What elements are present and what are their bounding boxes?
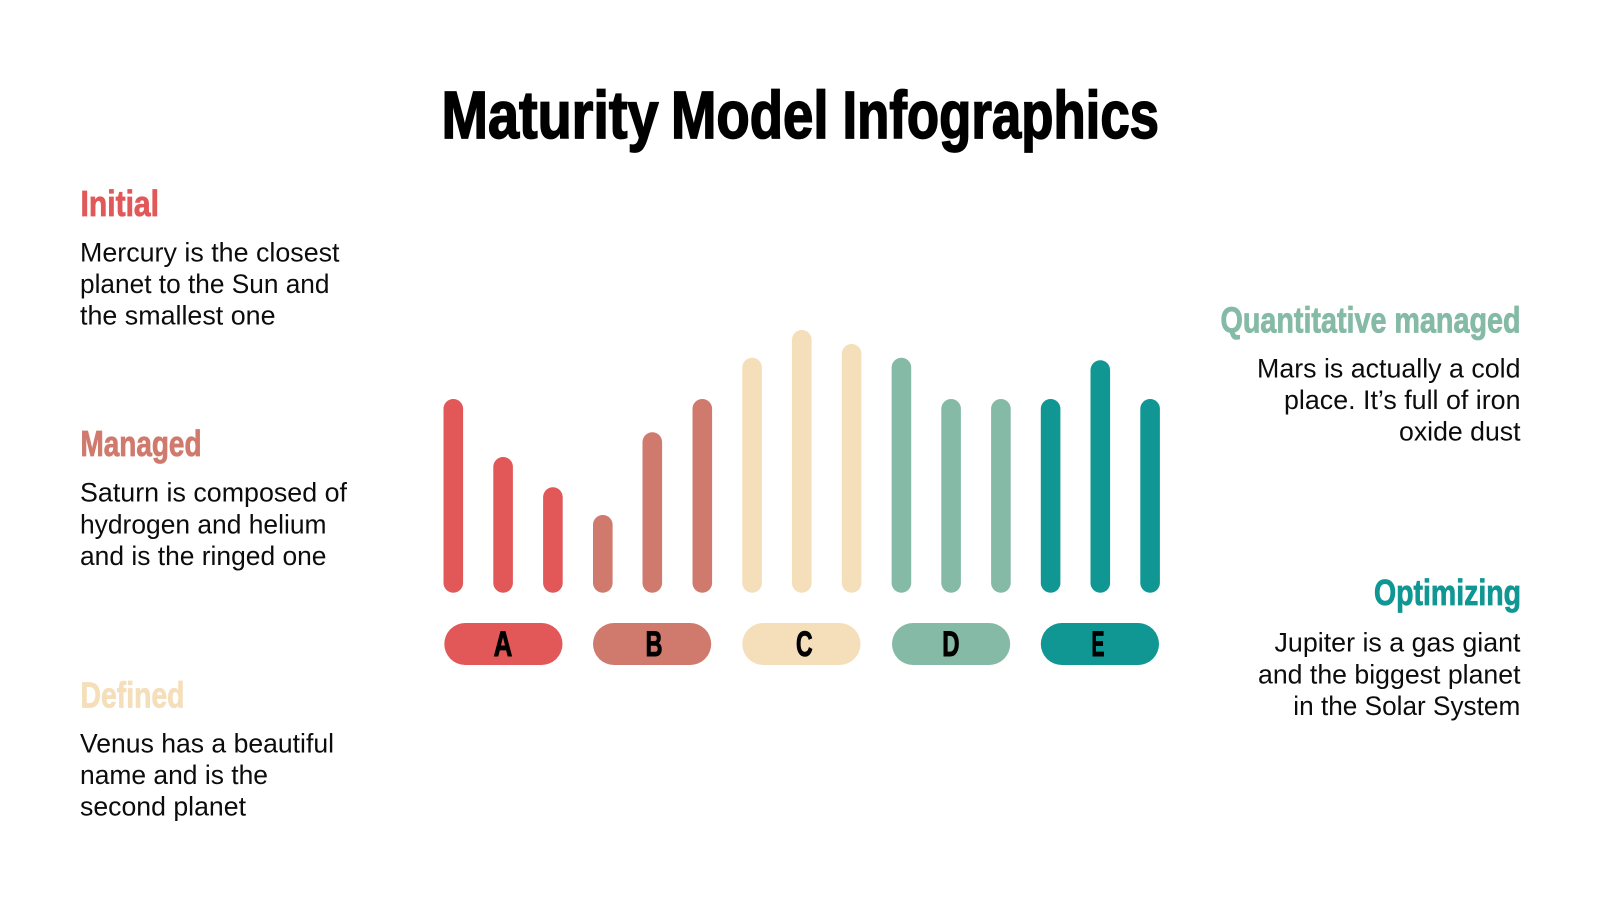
panel: Defined — [80, 674, 334, 821]
pill A: A — [494, 625, 512, 664]
title: Model — [671, 78, 828, 153]
pill C: C — [796, 625, 813, 664]
text: Defined description: Venus has a beautiful — [80, 729, 334, 759]
bar group D — [892, 358, 1011, 593]
bar group E — [1041, 360, 1160, 593]
panel: Quantitative managed — [1220, 300, 1521, 446]
text: Managed description: hydrogen and helium — [80, 510, 326, 540]
title — [442, 78, 1159, 153]
panel: Optimizing — [1258, 572, 1521, 721]
text: Defined description — [80, 729, 334, 821]
text: Defined description: name and is the — [80, 760, 268, 790]
text: Initial description: planet to the Sun and — [80, 269, 330, 299]
panel: Initial — [80, 183, 340, 330]
category pills — [444, 623, 1159, 665]
text: Managed description: and is the ringed one — [80, 541, 326, 571]
text: Optimizing description — [1258, 628, 1521, 721]
pill B: B — [646, 625, 662, 664]
text: Optimizing description: and the biggest planet — [1258, 659, 1521, 689]
text: Quantitative managed description: oxide dust — [1399, 416, 1521, 446]
pill D — [892, 623, 1010, 665]
text: Managed description — [80, 478, 348, 571]
heading: Managed: Managed — [80, 423, 202, 464]
text: Initial description: the smallest one — [80, 300, 276, 330]
heading: Quantitative managed: Quantitative managed — [1220, 300, 1520, 340]
bar group A — [444, 399, 563, 593]
text: Initial description: Mercury is the closest — [80, 238, 340, 268]
bar group B — [593, 399, 712, 593]
title: Maturity — [442, 78, 658, 153]
text: Quantitative managed description: place. It’s full of iron — [1284, 385, 1520, 415]
pill D: D — [942, 625, 960, 664]
text: Managed description: Saturn is composed of — [80, 478, 348, 508]
pill B — [593, 623, 711, 665]
title: Infographics — [842, 78, 1159, 153]
pill E: E — [1092, 625, 1104, 664]
panel: Managed — [80, 423, 348, 571]
heading: Initial: Initial — [80, 183, 159, 224]
heading: Optimizing: Optimizing — [1374, 572, 1521, 613]
pill E — [1041, 623, 1159, 665]
text: Optimizing description: Jupiter is a gas giant — [1274, 628, 1521, 658]
text: Quantitative managed description: Mars is actually a cold — [1257, 353, 1520, 383]
text: Defined description: second planet — [80, 791, 247, 821]
text: Initial description — [80, 238, 340, 330]
text: Optimizing description: in the Solar System — [1293, 691, 1520, 721]
heading: Defined: Defined — [80, 674, 184, 715]
bar chart — [444, 330, 1160, 593]
bar group C — [742, 330, 861, 593]
pill C — [742, 623, 860, 665]
text: Quantitative managed description — [1257, 353, 1521, 446]
pill A — [444, 623, 562, 665]
